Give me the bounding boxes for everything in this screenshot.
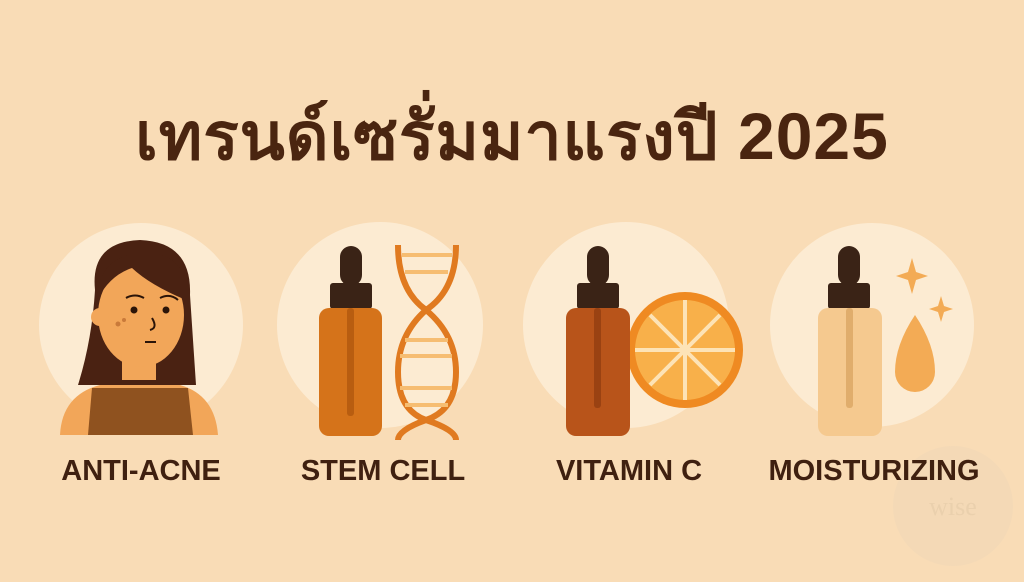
label: anti-acne: ANTI-ACNE [61, 455, 221, 487]
icon: stem cell serum [277, 222, 483, 440]
title: เทรนด์เซรั่มมาแรงปี 2025 [135, 99, 889, 173]
icon: woman with acne [39, 223, 243, 435]
watermark [893, 446, 1013, 566]
icon: vitamin C serum [523, 222, 743, 436]
icon: moisturizing serum [770, 223, 974, 436]
watermark: wise [929, 492, 977, 521]
label: vitamin c: VITAMIN C [556, 455, 702, 487]
label: stem cell: STEM CELL [301, 455, 465, 487]
label: moisturizing: MOISTURIZING [768, 455, 980, 487]
